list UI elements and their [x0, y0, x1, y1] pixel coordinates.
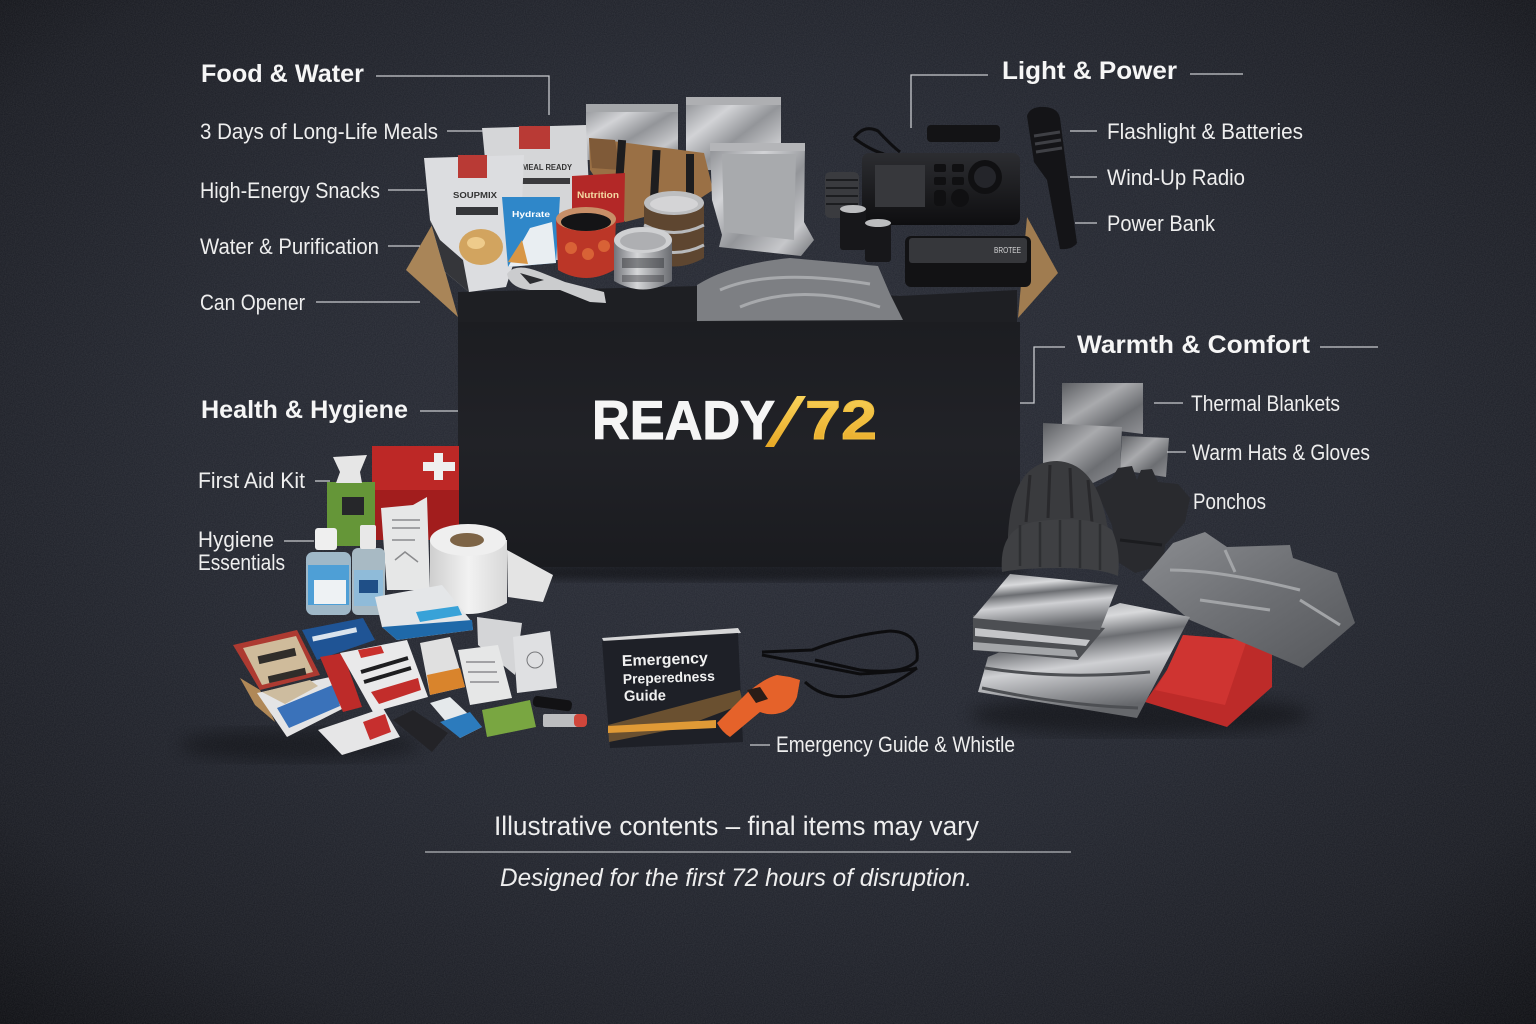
- power bank: [905, 236, 1031, 287]
- silver blanket stack: [973, 574, 1118, 660]
- box left flap: [406, 225, 458, 317]
- heading: warmth and comfort: Warmth & Comfort: [1077, 331, 1311, 359]
- small flashlight: [927, 125, 1000, 142]
- box right flap: [1018, 217, 1058, 318]
- meal pouch front: SOUPMIX: [453, 191, 498, 200]
- red snack packet: [572, 173, 625, 226]
- health and hygiene items: [233, 446, 587, 755]
- sanitizer bottle large: [306, 528, 351, 615]
- blue snack packet: [502, 197, 560, 267]
- red can: [556, 207, 616, 278]
- label: hygiene essentials: Hygiene: [198, 527, 274, 552]
- label: hygiene essentials: Essentials: [198, 550, 285, 575]
- foil pouches: [1043, 383, 1169, 483]
- white and blue pack: [375, 585, 473, 640]
- silver pouch back right: [686, 97, 781, 170]
- label: thermal blankets: Thermal Blankets: [1191, 391, 1340, 416]
- label: hygiene essentials: [198, 527, 285, 575]
- food and water items: [424, 97, 814, 303]
- silver blanket pack large: [978, 603, 1190, 718]
- label: guide and whistle: Emergency Guide & Whistle: [776, 732, 1015, 757]
- power bank: BROTEE: [994, 246, 1021, 255]
- gray poncho: [1142, 532, 1355, 668]
- heading: health and hygiene: Health & Hygiene: [201, 396, 408, 424]
- black tube: [532, 695, 573, 712]
- logo: READY/72: 72: [805, 389, 877, 451]
- plastic wrapped bag: [697, 258, 903, 321]
- footer note: [425, 811, 1071, 892]
- callout: health and hygiene: [198, 396, 458, 575]
- first aid pouch: [372, 446, 459, 540]
- callout: food and water: [200, 60, 549, 315]
- blue snack packet: Hydrate: [512, 210, 551, 219]
- bread bars: [589, 138, 713, 222]
- label: first aid kit: First Aid Kit: [198, 468, 305, 493]
- can opener: [507, 267, 606, 303]
- blue white packet: [430, 697, 482, 738]
- silver pouch front: [710, 143, 814, 256]
- paper box: [381, 497, 430, 590]
- footer disclaimer: Illustrative contents – final items may vary: [494, 811, 979, 841]
- blue pack: [302, 618, 375, 660]
- label: flashlight: Flashlight & Batteries: [1107, 119, 1303, 144]
- orange packet: [420, 637, 465, 695]
- heading: light and power: Light & Power: [1002, 57, 1177, 85]
- white meal packet: [340, 640, 428, 712]
- label: hats and gloves: Warm Hats & Gloves: [1192, 440, 1370, 465]
- meal pouch rear: MEAL READY: [522, 163, 573, 172]
- toilet roll: [430, 524, 553, 614]
- warmth and comfort items: [973, 383, 1355, 727]
- logo: READY/72: READY: [592, 389, 775, 451]
- green packet: [327, 482, 375, 546]
- callout: light and power: [911, 57, 1303, 236]
- meal pouch front: [424, 155, 524, 292]
- gloves: [1095, 466, 1190, 573]
- box with logo: [406, 217, 1058, 567]
- guide and whistle: [602, 628, 917, 748]
- white and blue packet: [257, 677, 346, 737]
- footer tagline: Designed for the first 72 hours of disruption.: [500, 864, 972, 892]
- radio: [862, 153, 1020, 225]
- guide book: Preperedness: [623, 668, 715, 687]
- tin front: [614, 227, 672, 290]
- guide book: [602, 628, 743, 748]
- lanyard: [762, 631, 917, 697]
- tan and red packs: [233, 630, 320, 722]
- large flashlight: [1027, 107, 1077, 249]
- label: can opener: Can Opener: [200, 290, 305, 315]
- knit hat: [1002, 461, 1119, 576]
- sanitizer bottle small: [352, 525, 385, 615]
- white bottom packet: [318, 708, 400, 755]
- label: radio: Wind-Up Radio: [1107, 165, 1245, 190]
- guide book: Guide: [624, 687, 666, 705]
- box front: [458, 322, 1020, 567]
- label: power bank: Power Bank: [1107, 211, 1216, 236]
- callout: warmth and comfort: [1020, 331, 1378, 514]
- lip balm tube: [543, 714, 587, 727]
- red packet: [320, 653, 362, 712]
- tin stack: [644, 191, 704, 266]
- label: water: Water & Purification: [200, 234, 379, 259]
- label: ponchos: Ponchos: [1193, 489, 1266, 514]
- batteries: [840, 205, 891, 262]
- white funnel cap: [333, 455, 367, 483]
- battery stack: [825, 172, 859, 218]
- green bandage roll: [482, 700, 536, 737]
- heading: food and water: Food & Water: [201, 60, 364, 88]
- red ponchos: [1145, 635, 1272, 727]
- label: snacks: High-Energy Snacks: [200, 178, 380, 203]
- label: meals: 3 Days of Long-Life Meals: [200, 119, 438, 144]
- guide book: Emergency: [622, 650, 708, 670]
- logo: READY/72: [592, 389, 877, 451]
- meal pouch rear: [482, 125, 589, 260]
- box interior black bag: [458, 286, 1017, 322]
- black packet: [393, 710, 448, 752]
- instruction papers: [458, 617, 557, 705]
- silver pouch back left: [586, 104, 678, 160]
- whistle: [717, 675, 800, 737]
- radio handle loop: [854, 129, 900, 154]
- light and power items: [825, 107, 1077, 287]
- red snack packet: Nutrition: [577, 190, 619, 200]
